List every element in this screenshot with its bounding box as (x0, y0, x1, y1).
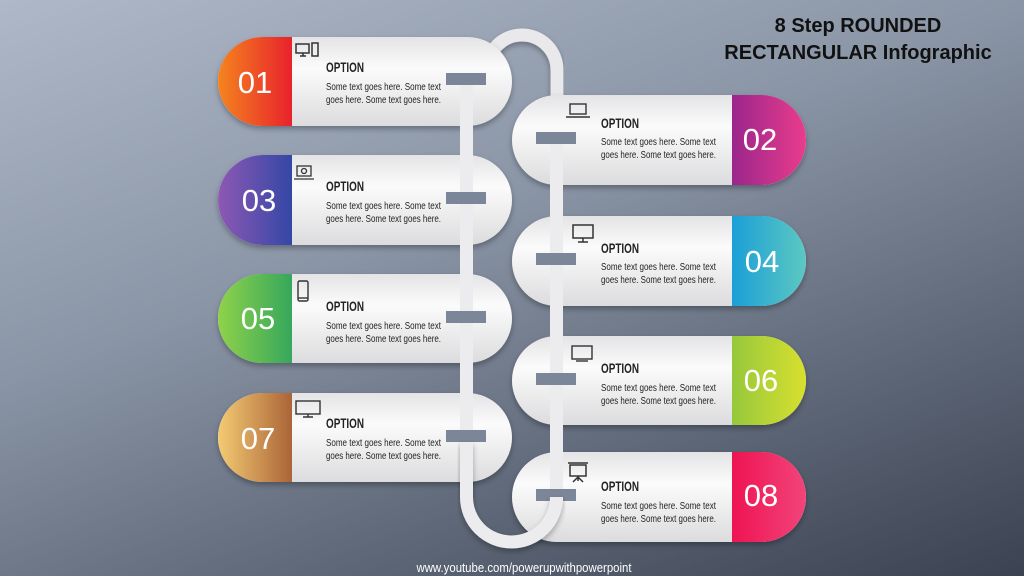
icon: phone (298, 281, 308, 301)
step 06: Some text goes here. Some text (601, 383, 716, 394)
title: 8 Step ROUNDED (775, 15, 941, 37)
step 08: goes here. Some text goes here. (601, 514, 716, 525)
step 04: goes here. Some text goes here. (601, 275, 716, 286)
step 07: OPTION (326, 415, 364, 431)
connector: left vertical chain (460, 85, 473, 430)
title (724, 15, 992, 64)
step 03: Some text goes here. Some text (326, 201, 441, 212)
step 02 (512, 95, 806, 185)
step 01: OPTION (326, 59, 364, 75)
connector: top arc (487, 35, 557, 110)
icon: laptop globe (294, 166, 314, 179)
step 02: Some text goes here. Some text (601, 137, 716, 148)
title: RECTANGULAR Infographic (724, 42, 992, 64)
step 04: OPTION (601, 240, 639, 256)
connector: right vertical chain (550, 144, 563, 489)
step 07: goes here. Some text goes here. (326, 451, 441, 462)
step 04 (512, 216, 806, 306)
step 02: goes here. Some text goes here. (601, 150, 716, 161)
icon: presentation board (568, 463, 588, 482)
step 04: Some text goes here. Some text (601, 262, 716, 273)
step 03: OPTION (326, 178, 364, 194)
step 06: OPTION (601, 360, 639, 376)
step 06: goes here. Some text goes here. (601, 396, 716, 407)
icon: monitor (296, 401, 320, 417)
step 06 (512, 336, 806, 425)
step 08: 08 (744, 478, 778, 513)
step 02: OPTION (601, 115, 639, 131)
step 08: OPTION (601, 478, 639, 494)
icon: desktop computer (296, 43, 318, 56)
step 05 (218, 274, 512, 363)
step 08 (512, 452, 806, 542)
step 05: Some text goes here. Some text (326, 321, 441, 332)
footer url: www.youtube.com/powerupwithpowerpoint (416, 560, 632, 575)
step 06: 06 (744, 363, 778, 398)
connector: bottom U (466, 442, 556, 542)
step 01: goes here. Some text goes here. (326, 95, 441, 106)
icon: laptop (566, 104, 590, 117)
step 05: OPTION (326, 298, 364, 314)
icon: monitor (573, 225, 593, 242)
step 05: 05 (241, 301, 275, 336)
step 08: Some text goes here. Some text (601, 501, 716, 512)
step 01: 01 (238, 65, 272, 100)
step 07: 07 (241, 421, 275, 456)
step 01 (218, 37, 512, 126)
slots (446, 73, 576, 501)
icon: tv (572, 346, 592, 361)
step 01: Some text goes here. Some text (326, 82, 441, 93)
step 03: 03 (242, 183, 276, 218)
step 07: Some text goes here. Some text (326, 438, 441, 449)
step 02: 02 (743, 122, 777, 157)
step 04: 04 (745, 244, 779, 279)
step 07 (218, 393, 512, 482)
step 03 (218, 155, 512, 245)
step 05: goes here. Some text goes here. (326, 334, 441, 345)
step 03: goes here. Some text goes here. (326, 214, 441, 225)
